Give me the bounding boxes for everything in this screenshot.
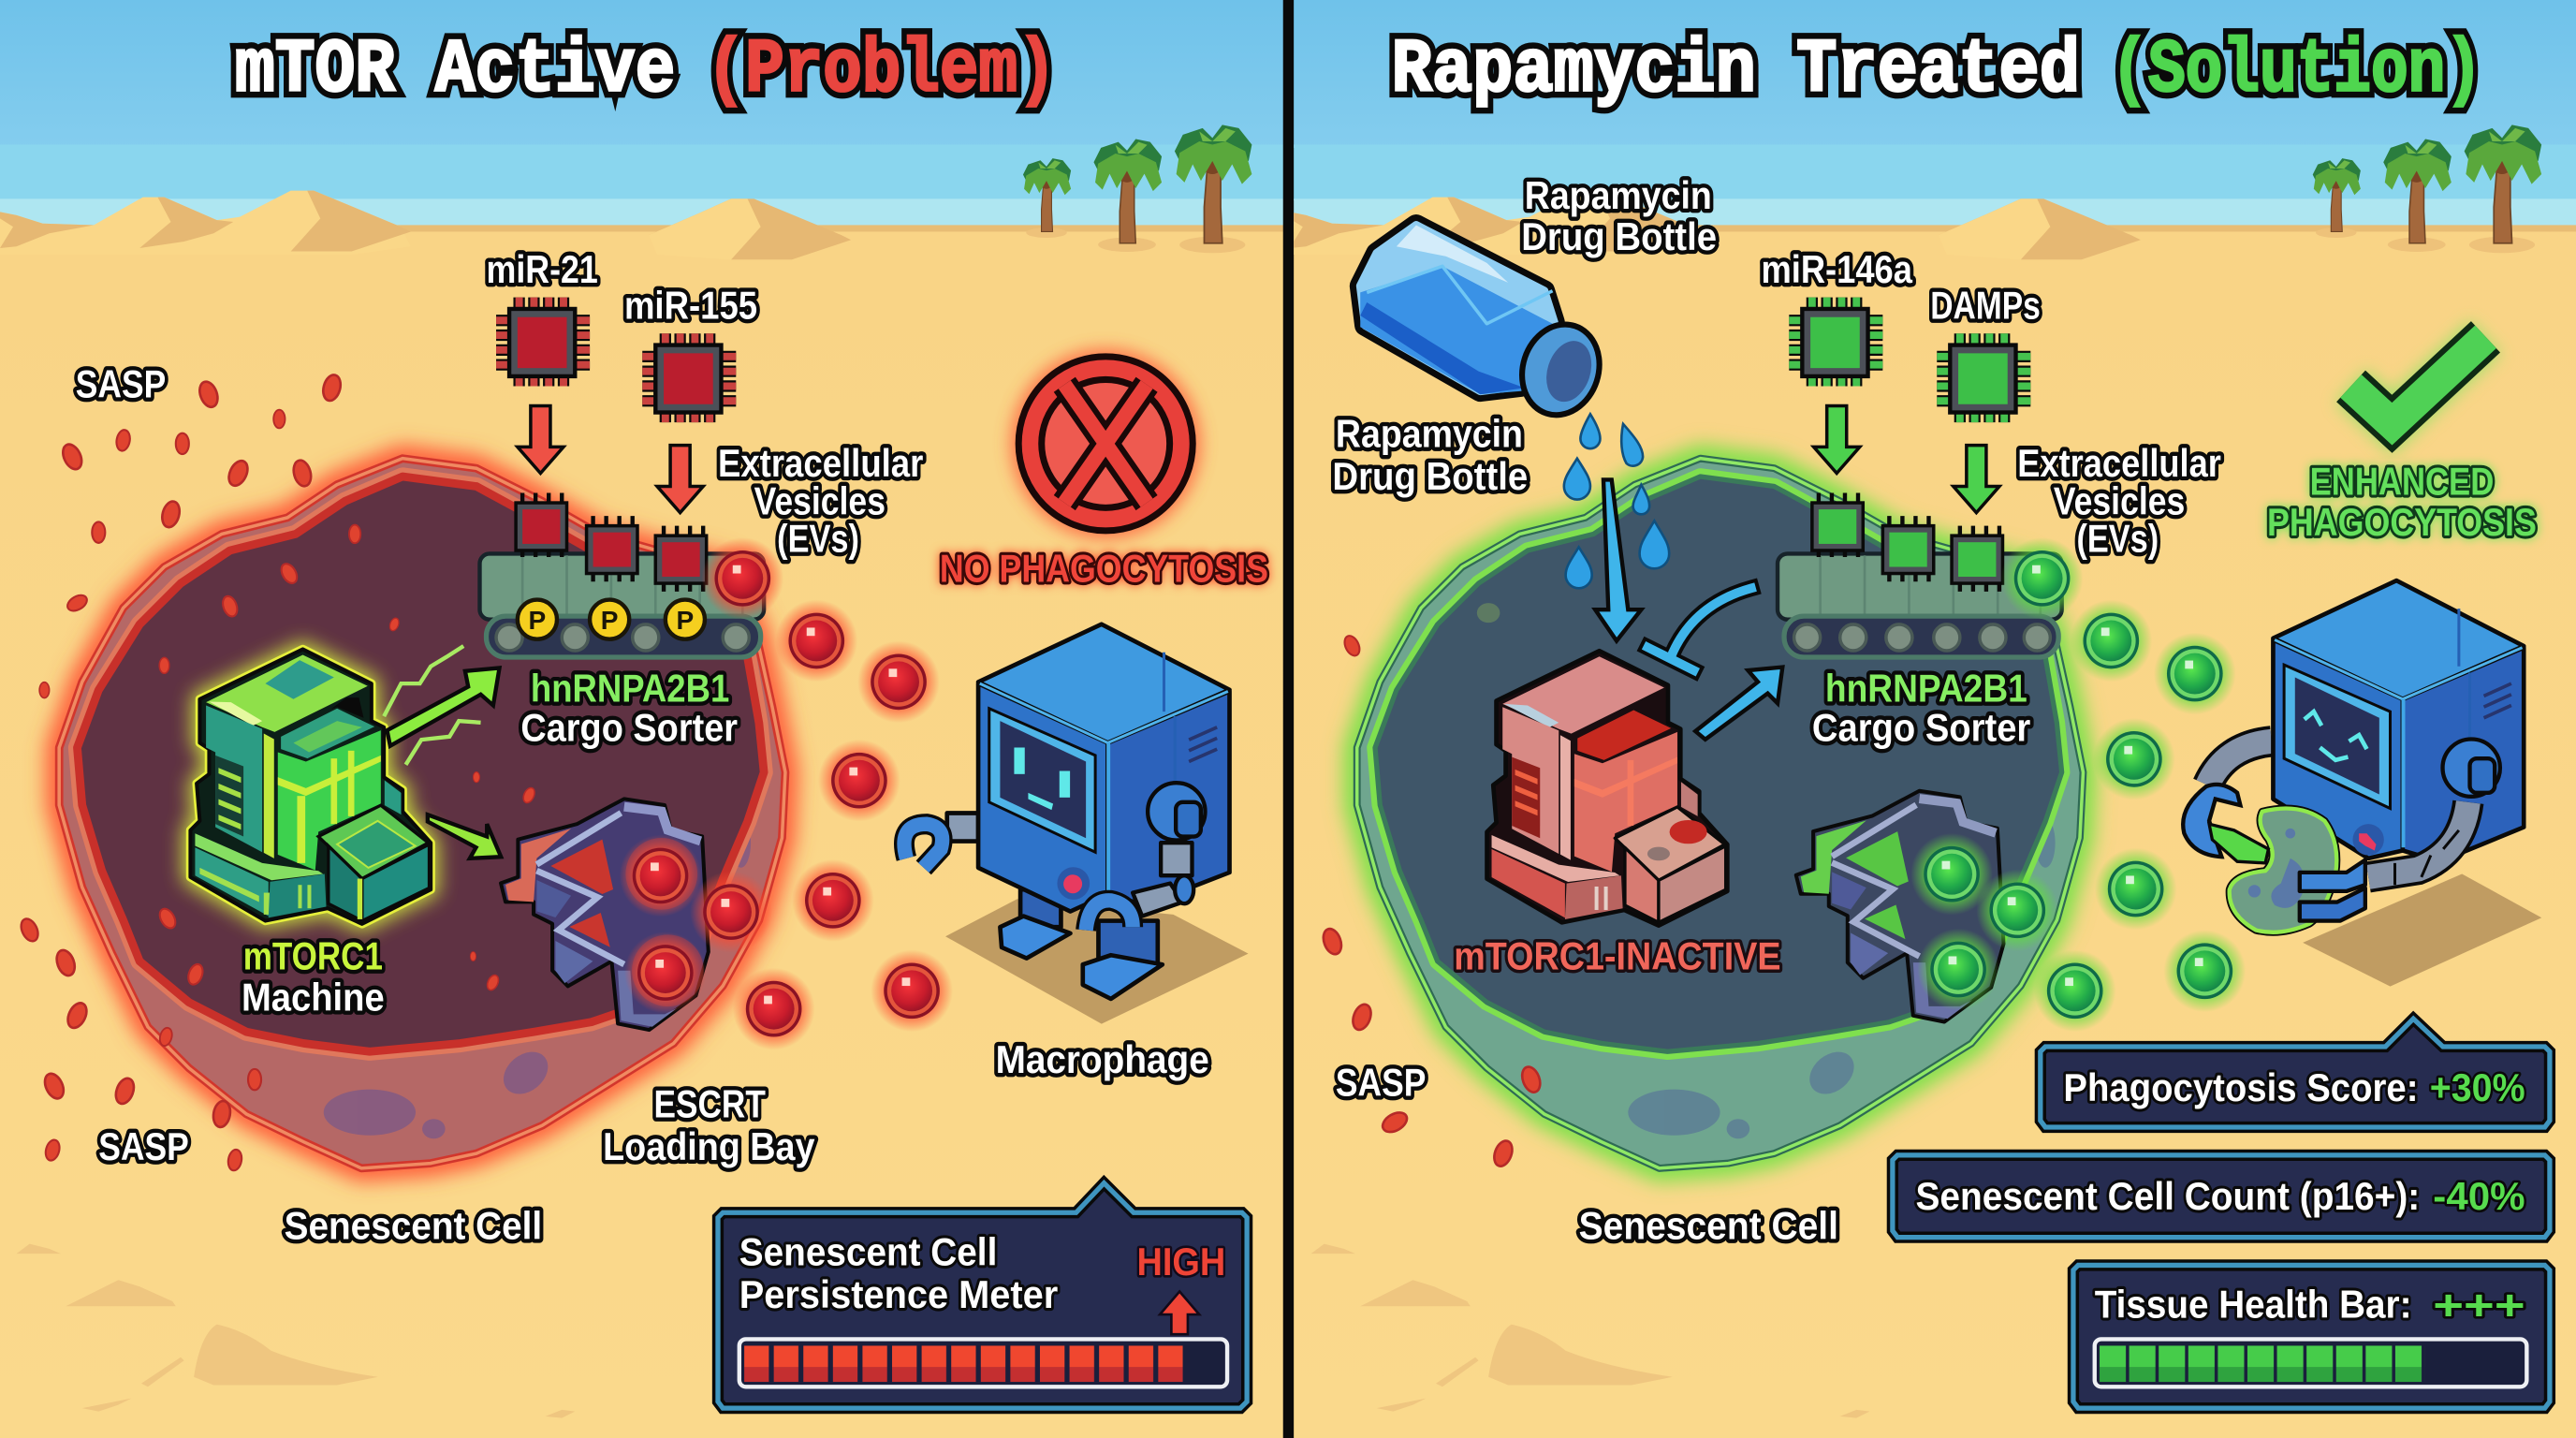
arrow: miR-146a down [1814, 406, 1860, 473]
arrows from mTORC1 [384, 646, 501, 858]
labels right: miR-146a [1761, 247, 1912, 291]
title right: Rapamycin Treated [1392, 29, 2080, 114]
title right: (Solution) [2111, 29, 2482, 114]
sand shadow patches left [17, 1244, 575, 1418]
labels left: Vesicles [754, 478, 886, 522]
labels right: Senescent Cell [1579, 1203, 1838, 1247]
HUD: tissue health bar: +++ [2433, 1281, 2525, 1328]
title right: Rapamycin Treated [1392, 29, 2080, 114]
labels left: Loading Bay [603, 1124, 815, 1168]
labels right: Cargo Sorter [1812, 706, 2030, 750]
arrow: DAMPs down [1954, 446, 1999, 513]
HUD: senescent cell count: Senescent Cell Count (p16+): [1915, 1174, 2420, 1218]
labels left: Macrophage [996, 1037, 1209, 1081]
labels left: hnRNPA2B1 [531, 666, 729, 710]
senescent cell left [59, 459, 785, 1168]
ESCRT loading bay right [1796, 791, 2004, 1022]
phosphate coins [518, 600, 705, 639]
labels left: SASP [98, 1124, 189, 1168]
HUD: senescent cell persistence meter [718, 1183, 1247, 1408]
HUD: phagocytosis score [2041, 1019, 2550, 1127]
labels right [1332, 173, 2221, 1247]
labels left: ESCRT [654, 1081, 766, 1125]
chip miR-155 [642, 333, 736, 422]
title left: (Problem) [707, 29, 1057, 114]
label: no phagocytosis: NO PHAGOCYTOSIS [940, 546, 1268, 590]
label: enhanced phagocytosis: PHAGOCYTOSIS [2267, 500, 2537, 544]
HUD: senescent cell count [1893, 1155, 2550, 1238]
HUD: phagocytosis score: Phagocytosis Score: [2063, 1065, 2419, 1109]
labels left: (EVs) [777, 517, 859, 561]
desert background right [1294, 0, 2576, 1438]
SASP particles right [1320, 634, 1544, 1168]
rapamycin drops [1564, 414, 1669, 588]
mTORC1 machine active [190, 649, 431, 924]
chip miR-21 [496, 298, 590, 386]
label: enhanced phagocytosis: ENHANCED [2310, 459, 2494, 503]
labels right: mTORC1-INACTIVE [1454, 934, 1781, 978]
SASP particles left [18, 373, 536, 1171]
labels left: Senescent Cell [285, 1203, 542, 1247]
labels left: SASP [76, 362, 166, 406]
HUD: phagocytosis score: +30% [2430, 1065, 2525, 1109]
macrophage left [904, 624, 1249, 1024]
arrow: miR-155 down [657, 446, 703, 513]
arrow: mTORC1 to sorter [1695, 668, 1782, 740]
label: enhanced phagocytosis [2267, 459, 2537, 544]
cargo chips on conveyor left [516, 493, 707, 592]
labels right: SASP [1336, 1061, 1426, 1105]
icon: no phagocytosis symbol [1010, 348, 1201, 539]
labels left: mTORC1 [243, 934, 383, 978]
extracellular vesicles red [620, 537, 953, 1050]
labels left [76, 247, 1209, 1247]
conveyor cargo sorter left [479, 553, 764, 657]
desert background left [0, 0, 1292, 1438]
labels left: Machine [242, 975, 385, 1019]
title left: (Problem) [707, 29, 1057, 114]
HUD: tissue health bar: Tissue Health Bar: [2095, 1283, 2411, 1327]
conveyor cargo sorter right [1778, 553, 2062, 657]
title left: mTOR Active [235, 29, 675, 114]
labels right: Vesicles [2054, 478, 2185, 522]
macrophage right engulfing debris [2183, 580, 2541, 987]
labels left: miR-21 [487, 247, 598, 291]
HUD: senescent cell persistence meter: Persistence Meter [739, 1272, 1058, 1316]
panel: mTOR active problem [0, 0, 1294, 1438]
HUD: senescent cell count: -40% [2433, 1174, 2525, 1218]
labels right: Drug Bottle [1521, 214, 1717, 258]
extracellular vesicles green [1910, 537, 2246, 1032]
sand shadow patches right [1311, 1244, 1869, 1418]
labels right: Rapamycin [1525, 173, 1712, 217]
senescent cell right [1357, 459, 2083, 1168]
labels right: Drug Bottle [1332, 454, 1528, 498]
title left [235, 29, 1057, 114]
ESCRT loading bay left [501, 799, 709, 1030]
icon: green check [2351, 337, 2485, 424]
phosphate coins: P [529, 606, 546, 635]
mTORC1 machine inactive [1487, 651, 1727, 926]
HUD: tissue health bar [2073, 1265, 2550, 1408]
cargo chips on conveyor right [1812, 493, 2002, 592]
labels left: Cargo Sorter [520, 706, 738, 750]
phosphate coins: P [677, 606, 694, 635]
chip miR-146a [1789, 298, 1882, 386]
labels right: DAMPs [1930, 283, 2041, 327]
title left: mTOR Active [235, 29, 675, 114]
phosphate coins: P [601, 606, 619, 635]
rapamycin drug bottle [1360, 225, 1611, 425]
chip DAMPs [1937, 333, 2030, 422]
HUD: senescent cell persistence meter: HIGH [1137, 1240, 1225, 1284]
labels left: miR-155 [624, 283, 757, 327]
arrow: curved inhibition [1647, 588, 1751, 670]
labels right: Extracellular [2017, 441, 2221, 485]
arrow: rapamycin down to mTORC1 [1595, 479, 1641, 640]
panel divider [1283, 0, 1294, 1438]
labels right: hnRNPA2B1 [1825, 666, 2027, 710]
labels right: Rapamycin [1336, 411, 1523, 455]
panel: rapamycin treated solution [1290, 0, 2576, 1438]
labels right: (EVs) [2076, 517, 2159, 561]
HUD: senescent cell persistence meter: Senescent Cell [739, 1229, 997, 1273]
labels left: Extracellular [718, 441, 923, 485]
title right: (Solution) [2111, 29, 2482, 114]
arrow: miR-21 down [518, 406, 564, 473]
